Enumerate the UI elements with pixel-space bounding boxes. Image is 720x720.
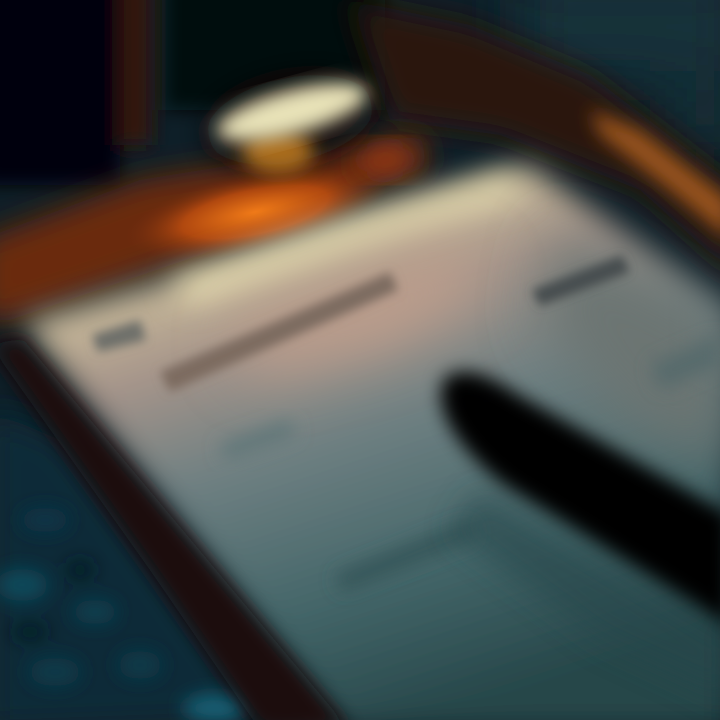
pen: black barrel — [441, 372, 720, 625]
dark document edge / clipboard side — [0, 338, 350, 720]
brown desk edge running to the right — [350, 0, 720, 280]
bright light band on paper — [170, 172, 525, 302]
peach reflection — [230, 250, 490, 375]
text line: faint lower — [335, 520, 478, 592]
orange highlight on right edge — [590, 110, 720, 240]
text line: upper left — [92, 320, 146, 352]
teal keyboard bottom left — [0, 410, 270, 720]
pen shadow — [450, 490, 720, 700]
panel: paper document — [22, 165, 720, 720]
text line: faint middle — [220, 420, 296, 460]
text line: long heading — [160, 272, 398, 392]
black panel: top left screen — [0, 0, 385, 185]
keyboard keys — [0, 508, 247, 720]
text line: faint right — [650, 335, 720, 390]
grey right side of paper — [540, 230, 720, 470]
orange glow band on desk — [0, 135, 430, 320]
icon: glowing lamp — [211, 71, 373, 174]
dark shadow under lamp — [198, 61, 382, 179]
top right dark teal area — [520, 0, 720, 150]
text line: right label — [532, 255, 630, 306]
